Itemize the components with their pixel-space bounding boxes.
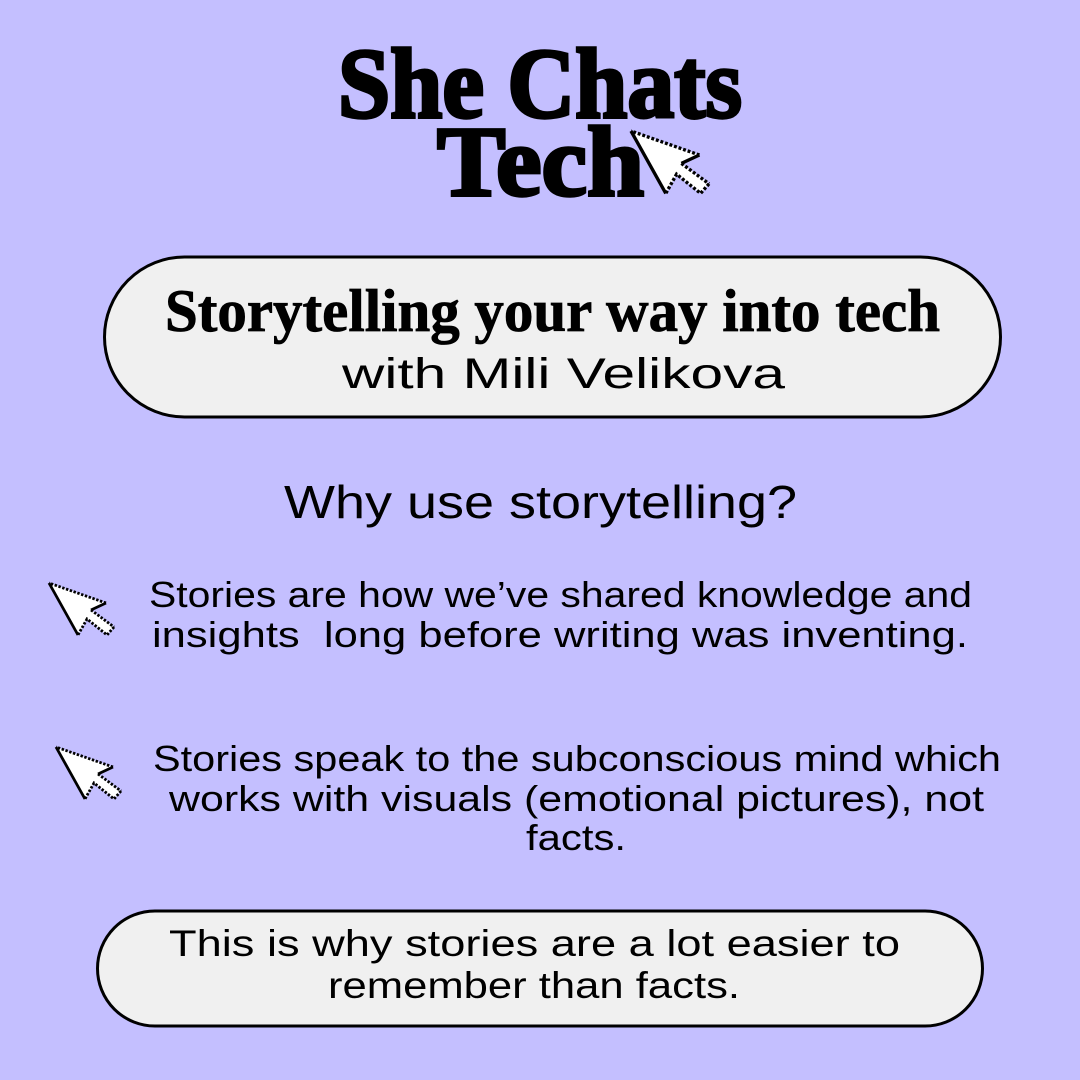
icon: logo cursor (631, 131, 709, 193)
text block: first reason: Stories are how we’ve shared knowledge and (149, 574, 972, 615)
icon: bullet cursor one (49, 583, 114, 635)
text block: second reason: facts. (526, 817, 626, 858)
heading: session title: Storytelling your way into tech (165, 278, 940, 344)
icon: bullet cursor two (56, 747, 121, 799)
text block: second reason (153, 738, 1001, 858)
text block: first reason: insights long before writing was inventing. (152, 614, 968, 655)
text: conclusion: remember than facts. (328, 965, 740, 1006)
text block: second reason: works with visuals (emotional pictures), not (168, 778, 984, 819)
text: conclusion (169, 923, 900, 1006)
logo title (338, 28, 742, 217)
logo title: She Chats (338, 28, 742, 139)
panel: conclusion pill (98, 911, 982, 1026)
logo title: Tech (437, 106, 644, 217)
text block: first reason (149, 574, 972, 655)
heading: why use storytelling: Why use storytelling? (284, 476, 797, 528)
text: conclusion: This is why stories are a lot easier to (169, 923, 900, 964)
text block: second reason: Stories speak to the subconscious mind which (153, 738, 1001, 779)
panel: session title pill (104, 257, 1000, 417)
text: speaker: with Mili Velikova (341, 350, 785, 398)
